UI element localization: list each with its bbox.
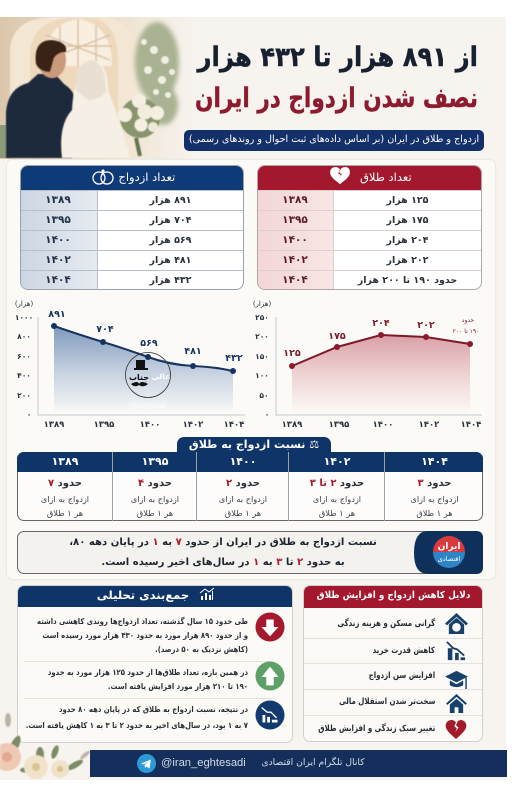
column 1395: هر ۱ طلاق <box>137 508 173 518</box>
icon: graduation cap <box>445 670 468 689</box>
text: ratio <box>26 704 248 730</box>
row 1395: ۱۳۹۵ <box>282 214 308 226</box>
row 1395 <box>258 210 481 231</box>
row 1404 <box>21 270 243 291</box>
footer handle: @iran_eghtesadi <box>161 757 246 769</box>
row 1400 <box>258 230 481 251</box>
chart: marriages line chart: ۸۰۰ <box>17 332 31 341</box>
groom <box>6 40 75 158</box>
column 1389: ۱۳۸۹ <box>52 455 78 468</box>
column 1400: ازدواج به ازای <box>219 494 267 504</box>
subtitle pill: ازدواج و طلاق در ایران (بر اساس داده‌های ثبت احوال و روندهای رسمی) <box>189 134 479 145</box>
subtitle pill <box>184 130 484 151</box>
chart: divorces line chart: (هزار) <box>253 300 271 308</box>
chart: divorces line chart: ۵۰ <box>259 391 269 400</box>
logo: Iran Eghtesadi <box>414 531 483 574</box>
title line 1: از ۸۹۱ هزار تا ۴۳۲ هزار <box>198 42 478 73</box>
row 1389 <box>258 190 481 211</box>
column 1389 <box>17 452 112 518</box>
icon: house with money <box>445 613 468 634</box>
row 1404: ۱۴۰۴ <box>282 274 308 286</box>
chart: divorces line chart: ۱۳۹۵ <box>329 420 349 430</box>
logo: Iran Eghtesadi: اقتصادی <box>438 555 460 563</box>
column 1389: ازدواج به ازای <box>41 494 89 504</box>
row 1395 <box>21 210 243 231</box>
chart: marriages line chart: ۰ <box>27 410 31 419</box>
column 1404 <box>384 452 484 521</box>
reason 2 <box>304 639 482 664</box>
row 1404: ۴۳۲ هزار <box>150 275 191 286</box>
reason 1 <box>304 608 482 639</box>
chart: divorces line chart: ۰ <box>265 410 269 419</box>
column 1402: ازدواج به ازای <box>313 494 361 504</box>
row 1402 <box>258 250 481 271</box>
chart: divorces line chart: ۱۴۰۲ <box>419 420 440 430</box>
column 1402: حدود ۲ تا ۳ <box>310 478 364 489</box>
chart: divorces line chart: ۱۴۰۴ <box>461 420 481 430</box>
chart: marriages line chart: ۴۳۲ <box>225 353 243 364</box>
column 1402 <box>288 452 385 521</box>
chart: divorces line chart: ۱۴۰۰ <box>373 420 393 430</box>
row 1389: ۱۳۸۹ <box>45 194 71 206</box>
reasons header: دلایل کاهش ازدواج و افزایش طلاق <box>317 590 471 601</box>
reason 3 <box>304 664 482 690</box>
icon: falling chart <box>256 700 284 730</box>
row 1400: ۱۴۰۰ <box>45 234 71 246</box>
year column shade <box>258 166 333 291</box>
chart: divorces line chart: ۱۹۰ تا ۲۰۰ <box>453 328 479 335</box>
row 1404: حدود ۱۹۰ تا ۲۰۰ هزار <box>358 275 457 286</box>
icon: chart <box>200 588 214 600</box>
column 1395: حدود ۴ <box>138 478 172 489</box>
callout <box>17 531 483 574</box>
ratio heading tab: ⚖ نسبت ازدواج به طلاق <box>189 438 319 451</box>
row 1404: ۱۴۰۴ <box>45 274 71 286</box>
summary header <box>17 585 295 607</box>
chart: divorces line chart: ۱۲۵ <box>283 348 301 359</box>
reason 4 <box>304 690 482 716</box>
column 1404: ۱۴۰۴ <box>421 455 448 468</box>
column 1402: ۱۴۰۲ <box>324 455 350 468</box>
callout text: نسبت ازدواج به طلاق در ایران از حدود ۷ به ۱ در پایان دهه ۸۰، <box>69 537 377 548</box>
marriages header: تعداد ازدواج <box>118 170 175 184</box>
chart: divorces line chart: ۱۳۸۹ <box>282 420 303 430</box>
row 1400 <box>21 230 243 251</box>
divorces header <box>257 165 484 191</box>
chart: divorces line chart: ۱۰۰ <box>255 371 269 380</box>
chart: divorces line chart: ۲۰۰ <box>255 332 269 341</box>
row 1402: ۱۴۰۲ <box>45 254 71 266</box>
chart: divorces line chart: ۲۰۲ <box>417 320 435 331</box>
chart: marriages line chart: ۶۰۰ <box>17 352 31 361</box>
watermark: عالی <box>152 372 170 381</box>
row 1395: ۱۷۵ هزار <box>387 215 428 226</box>
column 1404: هر ۱ طلاق <box>416 508 453 518</box>
column 1402: هر ۱ طلاق <box>319 508 355 518</box>
row 1400: ۱۴۰۰ <box>282 234 308 246</box>
chart: divorces line chart <box>253 300 482 430</box>
text: divorces: در همین بازه، تعداد طلاق‌ها از حدود ۱۲۵ هزار مورد به حدود <box>48 667 248 677</box>
chart: marriages line chart: ۷۰۴ <box>96 324 114 335</box>
chart: divorces line chart: ۲۵۰ <box>255 313 269 322</box>
bouquet <box>118 94 164 156</box>
column 1400 <box>196 452 289 521</box>
row 1404 <box>258 270 481 291</box>
row 1402 <box>21 250 243 271</box>
icon: telegram <box>137 754 156 773</box>
reason 1: گرانی مسکن و هزینه زندگی <box>337 619 435 629</box>
hero image: bride and groom <box>0 17 183 159</box>
footer channel text: کانال تلگرام ایران اقتصادی <box>261 757 365 768</box>
icon: declining bars <box>446 641 466 660</box>
row 1395: ۱۳۹۵ <box>45 214 71 226</box>
column 1395: ازدواج به ازای <box>131 494 179 504</box>
divorces header: تعداد طلاق <box>360 170 412 184</box>
panel: reasons <box>303 585 483 742</box>
watermark: جناب <box>129 373 149 382</box>
main panel <box>7 160 495 579</box>
text: marriages: طی حدود ۱۵ سال گذشته، تعداد ازدواج‌ها روندی کاهشی داشته <box>37 616 248 626</box>
reason 4: سخت‌تر شدن استقلال مالی <box>339 697 435 707</box>
icon: broken heart <box>446 720 466 739</box>
row 1389: ۱۲۵ هزار <box>387 195 428 206</box>
table: marriages <box>20 165 244 290</box>
watermark: @Aalijnab <box>130 402 166 410</box>
row 1400: ۲۰۴ هزار <box>387 235 428 246</box>
row 1402: ۲۰۲ هزار <box>387 255 428 266</box>
column 1400: حدود ۲ <box>226 478 260 489</box>
chart: marriages line chart: ۸۹۱ <box>48 309 66 320</box>
reason 5: تغییر سبک زندگی و افزایش طلاق <box>318 724 435 734</box>
title <box>195 42 478 114</box>
reason 3: افزایش سن ازدواج <box>368 671 435 681</box>
chart: marriages line chart: ۱۴۰۲ <box>183 420 204 430</box>
title line 2: نصف شدن ازدواج در ایران <box>195 83 478 114</box>
chart: divorces line chart: حدود <box>462 317 474 324</box>
chart: marriages line chart: ۴۰۰ <box>17 371 31 380</box>
icon: down arrow <box>256 612 284 642</box>
text: ratio: در نتیجه، نسبت ازدواج به طلاق که در پایان دهه ۸۰ حدود <box>59 704 248 714</box>
chart: marriages line chart: ۱۳۸۹ <box>44 420 65 430</box>
logo: Iran Eghtesadi: ایران <box>438 542 460 552</box>
text: marriages: (کاهش نزدیک به ۵۰ درصد). <box>155 644 248 654</box>
chart: marriages line chart <box>15 300 245 430</box>
ratio heading tab <box>177 437 331 454</box>
row 1402: ۴۸۱ هزار <box>150 255 191 266</box>
icon: broken heart <box>330 167 350 184</box>
reasons header <box>303 585 485 608</box>
row 1395: ۷۰۴ هزار <box>150 215 191 226</box>
column 1395: ۱۳۹۵ <box>142 455 168 468</box>
row 1402: ۱۴۰۲ <box>282 254 308 266</box>
row 1400: ۵۶۹ هزار <box>150 235 191 246</box>
chart: marriages line chart: ۱۴۰۰ <box>140 420 160 430</box>
chart: divorces line chart: ۱۷۵ <box>328 331 346 342</box>
column 1389: هر ۱ طلاق <box>47 508 83 518</box>
column 1400: ۱۴۰۰ <box>230 455 256 468</box>
chart: marriages line chart: (هزار) <box>15 300 33 308</box>
chart: marriages line chart: ۱۴۰۴ <box>224 420 244 430</box>
chart: marriages line chart: ۲۰۰ <box>17 391 31 400</box>
chart: marriages line chart: ۵۶۹ <box>140 338 158 349</box>
text: divorces <box>48 667 248 691</box>
chart: marriages line chart: ۴۸۱ <box>184 346 202 357</box>
row 1389: ۸۹۱ هزار <box>150 195 191 206</box>
callout text: به حدود ۲ تا ۳ به ۱ در سال‌های اخیر رسیده است. <box>101 557 345 568</box>
flowers decoration <box>0 712 90 780</box>
bride <box>61 60 130 158</box>
callout text <box>69 537 377 568</box>
ratio table <box>17 452 483 521</box>
watermark <box>126 352 170 410</box>
footer bar <box>90 750 507 777</box>
icon: up arrow <box>256 662 284 690</box>
panel: summary <box>17 585 293 743</box>
column 1395 <box>112 452 197 521</box>
chart: divorces line chart: ۲۰۴ <box>372 318 390 329</box>
column 1404: حدود ۳ <box>418 478 451 489</box>
text: marriages <box>37 616 248 654</box>
icon: rings <box>92 169 114 185</box>
icon: house <box>446 694 467 713</box>
column 1389: حدود ۷ <box>48 478 82 489</box>
chart: marriages line chart: ۱۳۹۵ <box>94 420 114 430</box>
reason 2: کاهش قدرت خرید <box>373 646 435 656</box>
text: marriages: و از حدود ۸۹۰ هزار مورد به حدود ۴۳۰ هزار مورد رسیده است <box>42 630 248 640</box>
row 1389: ۱۳۸۹ <box>282 194 308 206</box>
row 1389 <box>21 190 243 211</box>
column 1404: ازدواج به ازای <box>410 494 459 504</box>
chart: divorces line chart: ۱۵۰ <box>255 352 269 361</box>
chart: marriages line chart: ۱۰۰۰ <box>15 313 33 322</box>
text: ratio: ۷ به ۱ بود، در سال‌های اخیر به حدود ۲ تا ۳ به ۱ کاهش یافته است. <box>26 720 248 730</box>
year column shade <box>21 166 97 291</box>
text: divorces: ۱۹۰ تا ۲۱۰ هزار مورد افزایش یافته است. <box>108 681 248 691</box>
summary header: جمع‌بندی تحلیلی <box>97 588 189 602</box>
column 1400: هر ۱ طلاق <box>225 508 261 518</box>
table: divorces <box>257 165 482 290</box>
marriages header <box>20 165 246 191</box>
